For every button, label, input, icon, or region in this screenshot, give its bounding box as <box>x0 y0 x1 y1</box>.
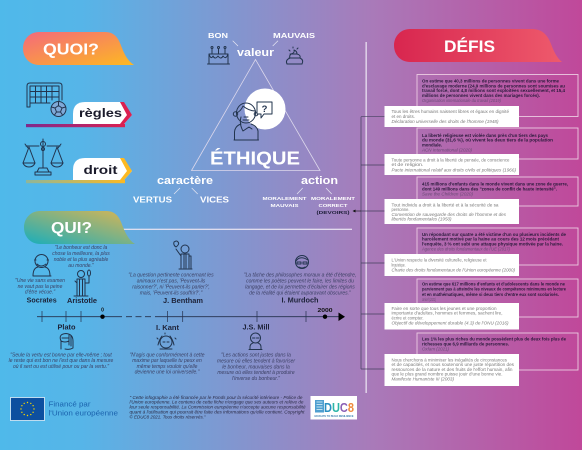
philosopher: J.S. Mill: le bonheur, mauvaises dans la <box>222 364 290 370</box>
label: règles <box>26 102 132 127</box>
philosopher: I. Kant: même temps vouloir qu'elle <box>137 364 198 370</box>
challenge 4: Agence des droits fondamentaux de l'UE (2017) <box>421 246 510 252</box>
heading: DÉFIS <box>394 29 562 62</box>
philosopher: Aristotle: Aristotle <box>67 298 97 305</box>
right 2: et de religion. <box>392 162 424 167</box>
connector lines <box>352 42 385 393</box>
right 6: Manifeste Humaniste III (2003) <box>392 376 454 382</box>
icon: birthday cake <box>208 46 230 64</box>
philosopher: J.S. Mill: mesure où elles tendent à produire <box>217 370 295 376</box>
right 2 <box>384 154 519 175</box>
philosopher: Socrates: ne vaut pas la peine <box>18 284 63 290</box>
philosopher: Aristotle <box>52 245 110 305</box>
philosopher: J. Bentham: mais, 'Peuvent-ils souffrir?'." <box>140 290 203 296</box>
right 1: Déclaration universelle des droits de l'homme (1948) <box>392 119 499 124</box>
challenge 4 <box>417 228 578 265</box>
text: funded by: l'Union européenne <box>48 410 118 418</box>
label: droit: droit <box>84 165 118 177</box>
right 6: Nous cherchons à minimiser les inégalités de circonstances <box>392 358 508 362</box>
philosopher: I. Kant: "N'agis que conformément à cette <box>130 352 205 358</box>
footer: disclaimer: leur seule responsabilité. La Commission européenne n'accepte aucune responsabilité <box>130 405 306 410</box>
philosopher: J.S. Mill: "Les actions sont justes dans la <box>221 352 291 358</box>
philosopher: Aristotle: "Le bonheur est donc la <box>55 245 108 251</box>
timeline <box>37 308 345 322</box>
right 5: écrire et compter. <box>392 316 424 320</box>
right 1 <box>384 106 519 127</box>
right 2: Pacte international relatif aux droits civils et politiques (1966) <box>392 167 516 172</box>
philosopher: Socrates: d'être vécue." <box>25 290 55 296</box>
icon: scales of justice <box>23 139 63 175</box>
footer: disclaimer: " Cette infographie a été financée par le Fonds pour la sécurité intérieure - Police de <box>130 395 303 400</box>
challenge 1: travail forcé, dont 4,8 millions sont exploitées sexuellement, et 15,4 <box>422 88 565 93</box>
icon: EU flag <box>10 398 44 420</box>
challenge 5 <box>417 279 578 317</box>
label: moralement correct: CORRECT <box>318 203 348 209</box>
right 3: Convention de sauvegarde des droits de l'homme et des <box>392 212 507 217</box>
label: moralement mauvais <box>262 196 307 209</box>
challenge 5: et en mathématiques, même si deux tiers d'entre eux sont scolarisés. <box>422 292 559 297</box>
icon: football goal <box>27 83 66 116</box>
right 2: Toute personne a droit à la liberté de pensée, de conscience <box>392 158 510 162</box>
philosopher: Socrates <box>15 254 65 304</box>
philosopher: Plato: le reste qui est bon ne l'est que dans la mesure <box>9 358 114 364</box>
label: moralement correct: MORALEMENT <box>311 196 355 202</box>
heading: DÉFIS: DÉFIS <box>444 37 495 56</box>
panel: defis <box>384 29 578 386</box>
footer: disclaimer: l'Union européenne. Le contenu de cette fiche n'engage que ses auteurs et relève de <box>130 400 304 405</box>
right 3: Tout individu a droit à la liberté et à la sécurité de sa <box>392 202 499 208</box>
right 5: Faire en sorte que tous les jeunes et une proportion <box>392 306 497 311</box>
philosopher: J.S. Mill: J.S. Mill <box>242 324 270 332</box>
heading: valeur: valeur <box>237 47 275 59</box>
right 6: et de capacités, et nous soutenons une juste répartition des <box>392 362 515 367</box>
philosopher: Socrates: Socrates <box>27 298 57 304</box>
philosopher: I. Kant: maxime par laquelle tu peux en <box>132 358 202 364</box>
challenge 3 <box>417 177 578 206</box>
footer: disclaimer: quant à l'utilisation qui pourrait être faite des informations qu'elle contient. Copyright <box>130 410 305 414</box>
challenge 4: Un répondant sur quatre a été victime d'un ou plusieurs incidents de <box>422 232 566 237</box>
right 5 <box>384 303 519 330</box>
right 5: Objectif de développement durable (4.3) de l'ONU (2016) <box>392 320 509 326</box>
heading: QUOI?: QUOI? <box>43 42 99 58</box>
philosopher: J. Bentham: raisonner?', ni 'Peuvent-ils parler?', <box>132 284 210 290</box>
philosopher: Aristotle: chose la meilleure, la plus <box>52 251 110 257</box>
philosopher: J. Bentham <box>128 241 214 305</box>
right 6 <box>384 354 519 386</box>
challenge 1: millions de personnes vivent dans des mariages forcés). <box>422 93 540 98</box>
challenge 1: On estime que 40,3 millions de personnes vivent dans une forme <box>422 78 559 84</box>
right 4: L'Union respecte la diversité culturelle, religieuse et <box>392 258 487 262</box>
label: règles: règles <box>79 108 122 120</box>
label: moralement correct: (DEVOIRS) <box>316 210 350 216</box>
right 3: personne. <box>392 207 410 212</box>
challenge 3: 415 millions d'enfants dans le monde vivent dans une zone de guerre, <box>422 182 568 187</box>
heading: caractere: caractère <box>157 175 213 187</box>
label: moralement mauvais: MAUVAIS <box>270 203 300 209</box>
challenge 2: La liberté religieuse est violée dans près d'un tiers des pays <box>422 133 548 138</box>
philosopher: J. Bentham: animaux n'est pas, 'Peuvent-ils <box>137 278 206 284</box>
label: moralement correct <box>311 196 355 216</box>
challenge 5: Unicef (2021) <box>422 297 436 302</box>
connectors <box>174 41 332 194</box>
white circle <box>244 88 286 130</box>
challenge 5: On estime que 617 millions d'enfants et d'adolescents dans le monde ne <box>422 282 565 286</box>
panel: quoi <box>23 32 134 183</box>
challenge 3: Save the Children (2020) <box>422 192 473 196</box>
triangle <box>192 60 320 170</box>
right 4: Charte des droits fondamentaux de l'Union européenne (2000) <box>392 268 515 272</box>
label: moralement mauvais: MORALEMENT <box>262 196 307 202</box>
heading: QUI? <box>24 211 135 244</box>
label: droit <box>26 158 132 183</box>
philosopher: Plato: Plato <box>58 324 76 332</box>
challenge 4: l'enquête, 3 % ont subi une attaque physique motivée par la haine. <box>422 242 563 247</box>
philosopher: J.S. Mill: mesure où elles tendent à favoriser <box>217 358 295 364</box>
challenge 4: harcèlement motivé par la haine au cours des 12 mois précédant <box>422 237 559 242</box>
label: VICES: VICES <box>200 196 229 205</box>
challenge 6: Les 1% les plus riches du monde possèdent plus de deux fois plus de <box>422 336 566 342</box>
challenge 6: Oxfam (2021) <box>422 346 449 352</box>
challenge 1: Organisation internationale du travail (2019) <box>422 98 501 103</box>
philosopher: I. Murdoch <box>244 256 356 305</box>
philosopher: I. Murdoch: "La tâche des philosophes moraux a été d'étendre, <box>244 272 356 278</box>
logo: EDUC8: EDUCATE TO BUILD RESILIENCE <box>314 415 354 418</box>
philosopher: Plato: "Seule la vertu est bonne par elle-même ; tout <box>10 352 112 358</box>
right 1: Tous les êtres humains naissent libres et égaux en dignité <box>392 109 509 114</box>
timeline: 0 <box>101 308 104 314</box>
philosopher: I. Murdoch: de la réalité qui étaient auparavant obscures." <box>249 290 351 296</box>
footer: EU funding <box>10 398 118 420</box>
right 1: et en droits. <box>392 114 415 119</box>
right 4: linguistique. <box>392 262 406 268</box>
title: ÉTHIQUE: ÉTHIQUE <box>210 148 300 168</box>
icon: poop <box>286 47 303 64</box>
challenge 1: d'esclavage moderne (24,9 millions de personnes sont soumises au <box>422 83 565 88</box>
philosopher: Aristotle: noble et la plus agréable <box>54 257 108 263</box>
philosopher: J.S. Mill <box>217 324 295 382</box>
timeline: 2000 <box>318 308 333 314</box>
right 5: importante d'adultes, hommes et femmes, sachent lire, <box>392 310 502 316</box>
heading: QUI?: QUI? <box>51 220 92 237</box>
challenge 2: mondiale. <box>422 142 442 147</box>
philosopher: Aristotle: au monde." <box>68 263 94 269</box>
heading line <box>120 229 352 230</box>
challenge 2 <box>417 128 578 159</box>
right 6: ressources de la nature et des fruits de l'effort humain, afin <box>392 367 513 372</box>
challenge 3: dont 149 millions dans des "zones de conflit de haute intensité". <box>422 186 557 191</box>
philosopher: J. Bentham: "La question pertinente concernant les <box>128 272 214 278</box>
philosopher: I. Murdoch: comme les poètes peuvent le faire, les limites du <box>246 278 354 284</box>
philosopher: Plato: où il sert ou est utilisé pour ou par la vertu." <box>13 364 109 370</box>
logo: EDUC8: DUC8 <box>324 401 354 415</box>
heading: action: action <box>301 175 338 187</box>
challenge 6: richesses que 6,9 milliards de personnes. <box>422 342 509 346</box>
right 6: que le plus grand nombre puisse jouir d'une bonne vie. <box>392 372 502 377</box>
right 3: libertés fondamentales (1950) <box>392 217 452 222</box>
philosopher: J. Bentham: J. Bentham <box>163 298 203 305</box>
panel: qui <box>9 211 356 382</box>
philosopher: I. Murdoch: I. Murdoch <box>282 298 318 305</box>
philosopher: I. Kant: I. Kant <box>156 325 180 332</box>
footer: disclaimer: © EDUC8 2021. Tous droits réservés." <box>130 414 206 419</box>
label: MAUVAIS: MAUVAIS <box>273 31 315 40</box>
label: BON: BON <box>208 31 228 40</box>
philosopher: I. Murdoch: langage, et de lui permettre d'éclairer des régions <box>245 284 355 290</box>
challenge 1 <box>417 74 578 116</box>
challenge 2: du monde (31,6 %), où vivent les deux tiers de la population <box>422 138 553 142</box>
logo: EDUC8 <box>310 396 357 420</box>
right 3 <box>384 199 519 224</box>
philosopher: I. Kant: devienne une loi universelle." <box>135 370 200 376</box>
challenge 2: ACN International (2020) <box>421 148 472 152</box>
label: VERTUS: VERTUS <box>133 196 172 205</box>
heading: QUOI? <box>23 32 134 65</box>
panel: ethique diagram <box>133 31 355 216</box>
philosopher: J.S. Mill: l'inverse du bonheur." <box>232 376 280 382</box>
text: funded by: Financé par <box>48 402 91 408</box>
icon: thinking person: ? <box>262 104 268 115</box>
philosopher: I. Kant <box>130 325 205 376</box>
right 4 <box>384 254 519 276</box>
icon: thinking person <box>233 102 272 140</box>
philosopher: Socrates: "Une vie sans examen <box>15 278 65 284</box>
philosopher: Plato <box>9 324 114 370</box>
challenge 6 <box>417 333 578 370</box>
